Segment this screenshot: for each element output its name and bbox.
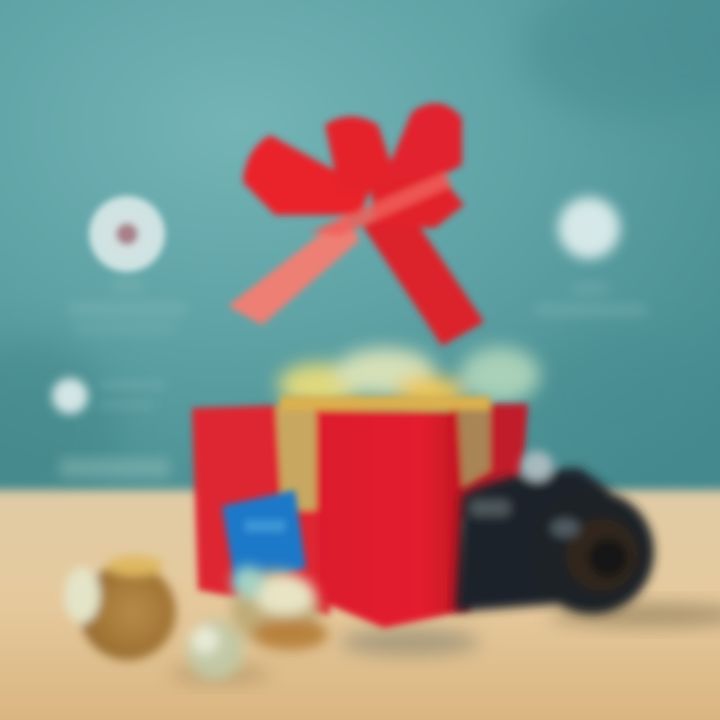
- box left side: [192, 404, 330, 615]
- right bow loop: [385, 103, 462, 190]
- middle bow loop: [325, 116, 400, 195]
- gift box: [192, 396, 528, 628]
- wooden table: [0, 490, 720, 720]
- box ribbon vertical: [276, 405, 316, 510]
- icon: small left badge: [52, 378, 165, 414]
- camera lens: [530, 490, 654, 614]
- lower left text block (blurred): [60, 458, 170, 478]
- right lower loop: [370, 175, 464, 228]
- gift contents: [278, 347, 540, 408]
- left caption text block (blurred): [68, 282, 186, 332]
- camera body: [455, 468, 610, 612]
- round ball: [64, 556, 176, 660]
- box back right side: [450, 404, 528, 530]
- camera: [455, 451, 654, 614]
- icon: right round badge: [558, 197, 620, 259]
- left ribbon tail: [228, 215, 360, 325]
- background wall: [0, 0, 720, 520]
- right ribbon tail: [362, 205, 484, 346]
- blue card: [222, 490, 306, 590]
- icon: left round badge: [89, 196, 165, 272]
- right caption text block (blurred): [535, 285, 647, 314]
- box rim: [280, 396, 490, 410]
- small ornaments: [187, 566, 328, 680]
- ribbon bow: [228, 103, 484, 346]
- box front: [316, 410, 470, 628]
- bow highlight: [310, 172, 452, 236]
- left bow loop: [243, 135, 370, 215]
